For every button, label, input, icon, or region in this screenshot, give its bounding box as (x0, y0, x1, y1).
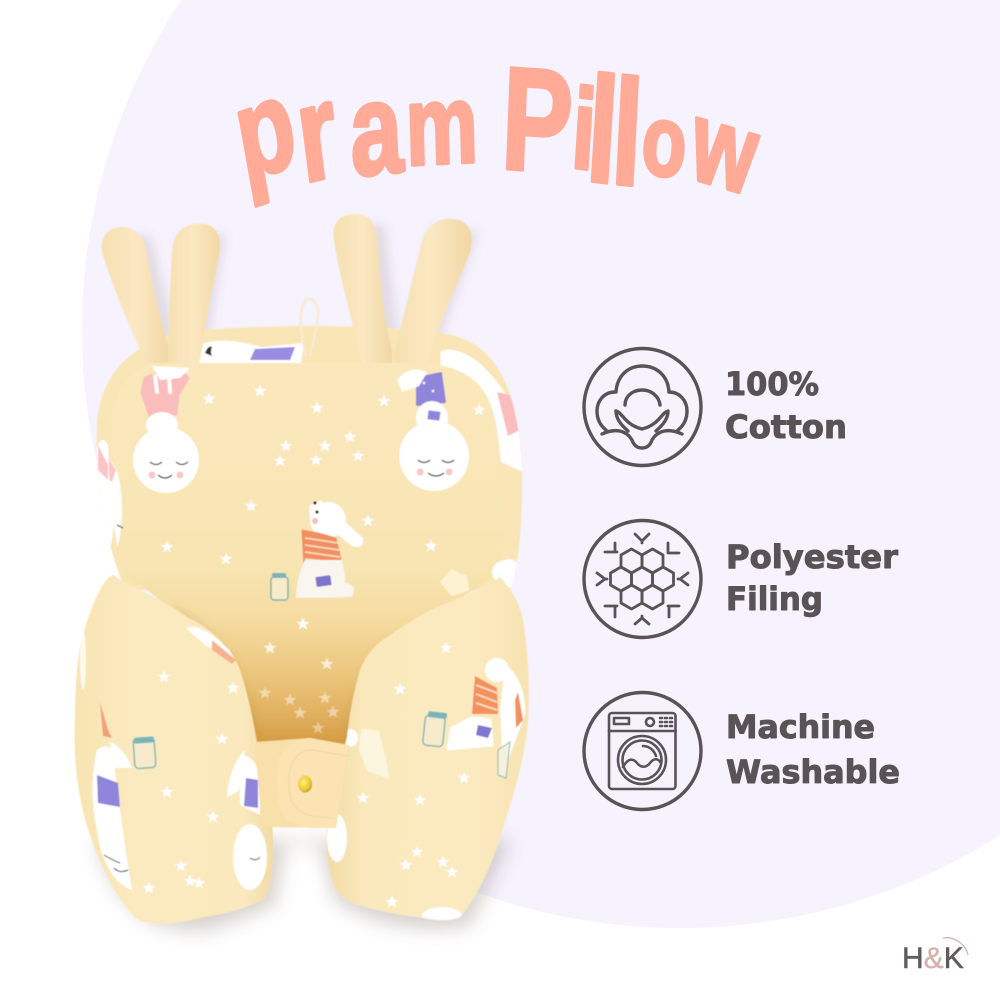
soft shadow behind ears (110, 225, 478, 360)
title: o (638, 83, 691, 200)
right arm pattern (327, 642, 525, 925)
rabbit ear 1 (102, 227, 170, 367)
snap button (298, 776, 312, 792)
icon: cotton (584, 348, 701, 466)
title: a (346, 54, 406, 205)
title: l (583, 45, 623, 216)
pillow back panel (91, 326, 525, 590)
seat stars (258, 618, 340, 734)
hanging loop (301, 299, 318, 356)
icon: honeycomb (584, 520, 701, 638)
pillow product photo (75, 214, 529, 930)
star on seat right (441, 570, 468, 595)
label: Machine Washable: Washable (726, 753, 900, 791)
feature: 100% cotton (584, 348, 847, 466)
left arm cushion (75, 575, 273, 924)
side moon right (492, 561, 514, 583)
feature: polyester filling (584, 520, 898, 638)
moon with bunny left (133, 366, 199, 493)
label: Machine Washable (726, 708, 900, 791)
pillow front panel (108, 362, 502, 564)
label: 100% Cotton: 100% (725, 365, 819, 403)
title: m (404, 61, 479, 189)
inner seat area (120, 570, 505, 745)
title: i (569, 65, 599, 195)
contact shadow on seat (170, 612, 400, 735)
label: Machine Washable: Machine (726, 708, 875, 746)
side bunny left (109, 460, 122, 546)
bunny feet on seat (296, 560, 354, 598)
right arm cushion (327, 577, 529, 925)
title: l (608, 48, 647, 218)
scattered stars (160, 384, 486, 564)
icon: washing machine (584, 692, 701, 810)
title: w (683, 77, 766, 220)
connecting strap with snap button (255, 738, 350, 828)
rabbit ear 2 (168, 224, 220, 365)
feature: machine washable (584, 692, 900, 810)
logo H&K: H&K (902, 942, 964, 975)
left arm pattern (80, 627, 267, 894)
rabbit ear 3 (333, 214, 392, 364)
jar on seat (271, 573, 288, 600)
label: Polyester Filing (726, 538, 898, 618)
label: 100% Cotton (725, 365, 847, 446)
label: 100% Cotton: Cotton (725, 408, 847, 446)
label: Polyester Filing: Polyester (726, 538, 898, 576)
standing bunny centre (302, 500, 363, 567)
title: P (499, 36, 575, 204)
drop shadow under pillow (95, 840, 510, 930)
title: p (224, 49, 305, 210)
label: Polyester Filing: Filing (726, 580, 823, 618)
moon with bunny right (399, 371, 469, 491)
rabbit ear 4 (393, 219, 472, 364)
title: r (289, 54, 345, 212)
